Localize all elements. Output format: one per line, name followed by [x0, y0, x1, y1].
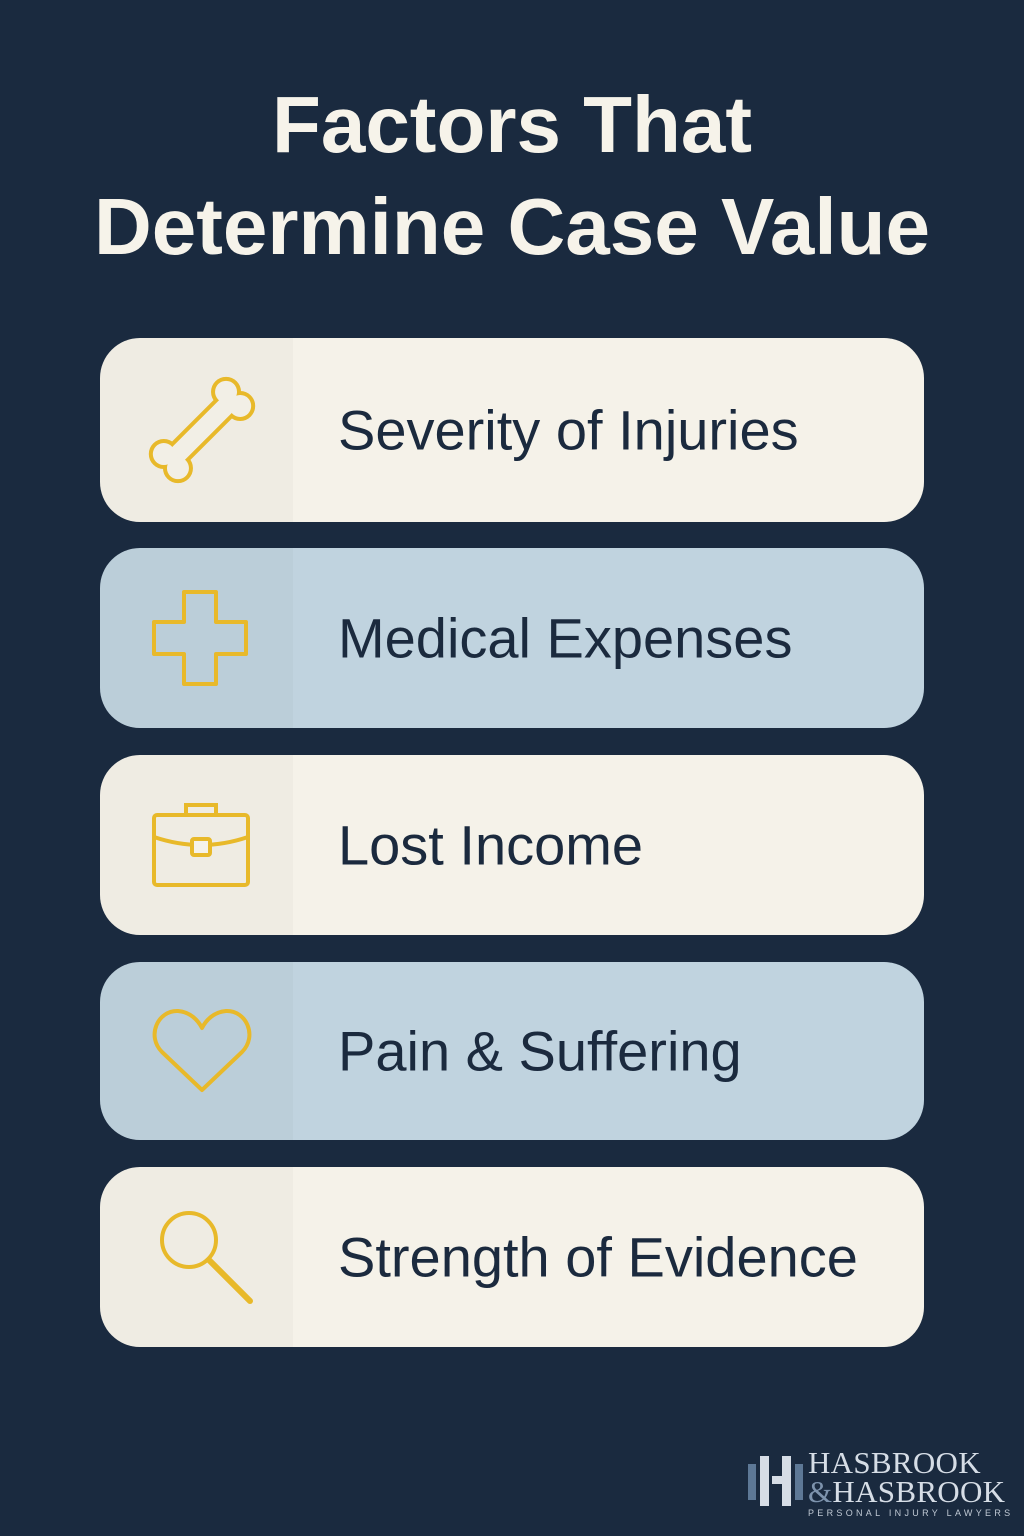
icon: cross: [152, 590, 248, 686]
logo: PERSONAL INJURY LAWYERS: [808, 1508, 1013, 1518]
title: Determine Case Value: [94, 182, 930, 271]
label: Severity of Injuries: [338, 398, 799, 462]
card: pain & suffering: [100, 962, 924, 1140]
logo: HASBROOK: [808, 1445, 981, 1480]
icon: magnifier: [160, 1211, 253, 1304]
card: severity of injuries: [100, 338, 924, 522]
logo: [748, 1445, 1013, 1518]
card: medical expenses: [100, 548, 924, 728]
icon: heart: [152, 1009, 252, 1092]
logo: &HASBROOK: [808, 1474, 1005, 1509]
label: Lost Income: [338, 814, 643, 876]
icon: briefcase: [152, 803, 250, 887]
label: Medical Expenses: [338, 606, 792, 670]
icon: bone: [148, 376, 256, 484]
label: Pain & Suffering: [338, 1020, 742, 1082]
title: Factors That: [272, 80, 752, 169]
title: [94, 80, 930, 271]
card: strength of evidence: [100, 1167, 924, 1347]
card: lost income: [100, 755, 924, 935]
label: Strength of Evidence: [338, 1226, 858, 1288]
